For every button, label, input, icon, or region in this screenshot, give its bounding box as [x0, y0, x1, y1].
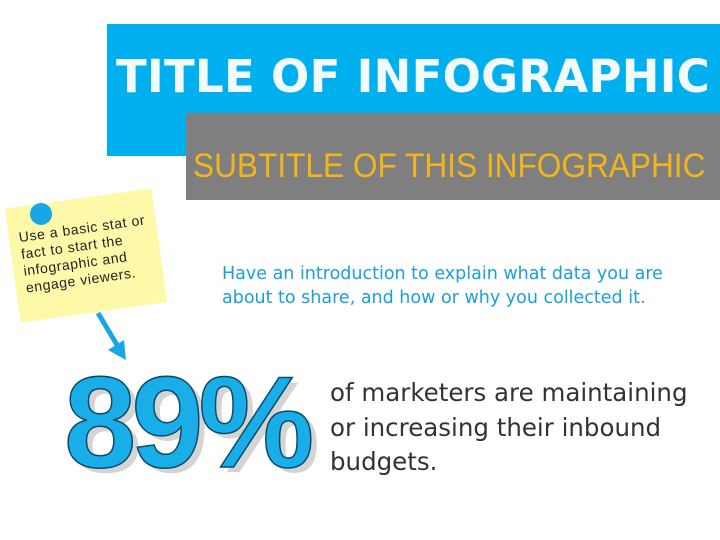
icon: pin — [30, 203, 52, 225]
title: TITLE OF INFOGRAPHIC — [116, 50, 710, 103]
sticky note — [5, 188, 167, 323]
subtitle banner — [186, 113, 720, 200]
title banner — [107, 24, 720, 156]
stat description: of marketers are maintaining or increasing their inbound budgets. — [330, 378, 688, 476]
sticky note text: Use a basic stat or fact to start the infographic and engage viewers. — [18, 212, 146, 296]
subtitle: SUBTITLE OF THIS INFOGRAPHIC — [193, 147, 705, 185]
big stat: 89% — [64, 349, 309, 495]
intro text: Have an introduction to explain what data you are about to share, and how or why you collected it. — [222, 264, 663, 308]
